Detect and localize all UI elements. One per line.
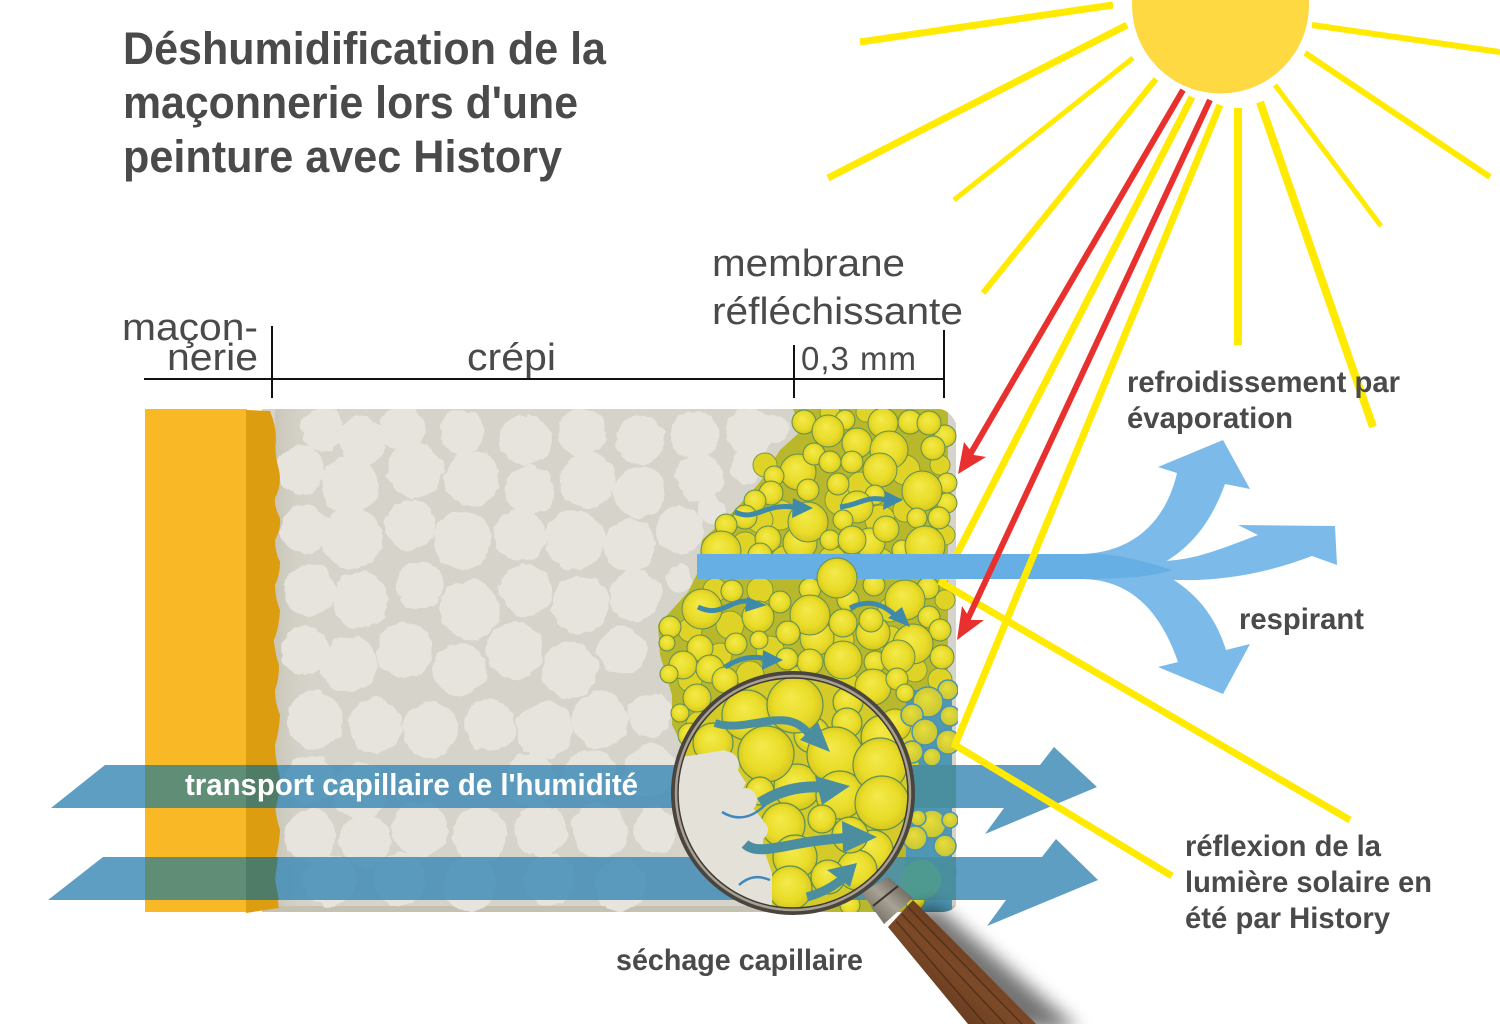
- crépi base: [262, 409, 956, 912]
- label: respirant: respirant: [1239, 603, 1364, 636]
- masonry shaded edge: [246, 410, 280, 913]
- red ray 1: [958, 90, 1183, 474]
- label: réflexion: été par History: [1185, 902, 1390, 935]
- membrane bubbles: [700, 409, 958, 554]
- lens contents: [677, 677, 909, 909]
- magnifying glass: [660, 670, 1080, 1024]
- band over wet zone: [905, 857, 956, 900]
- label: transport capillaire: transport capillaire de l'humidité: [185, 767, 638, 802]
- moisture arrow: [850, 603, 910, 627]
- reflected yellow ray 2: [955, 105, 1220, 876]
- red ray 2: [957, 100, 1210, 640]
- sun rays: [828, 5, 1500, 427]
- band over masonry: [145, 857, 246, 900]
- lens: magnified bubbles: [693, 677, 909, 910]
- red solar rays: [957, 90, 1210, 640]
- reflective membrane backing: [658, 409, 948, 915]
- masonry layer: [145, 409, 280, 913]
- label: membrane réfléchissante: réfléchissante: [712, 291, 963, 333]
- moisture arrow: [840, 491, 903, 510]
- ferrule: [862, 877, 913, 924]
- membrane filler bubbles: [678, 402, 955, 779]
- title: Déshumidification de la: [123, 23, 607, 74]
- label: réflexion: lumière solaire en: [1185, 866, 1432, 899]
- vapour arrow: right: [1120, 525, 1337, 580]
- vapour arrow: up: [1040, 440, 1250, 579]
- title: maçonnerie lors d'une: [123, 77, 578, 128]
- label: thickness: 0,3 mm: [801, 340, 916, 377]
- transport arrow 2: [48, 839, 1098, 926]
- band over masonry: [145, 765, 246, 808]
- label: membrane réfléchissante: membrane: [712, 243, 905, 285]
- lower right wet zone: [906, 690, 952, 912]
- label: membrane réfléchissante: [712, 243, 963, 333]
- label: refroidissement: évaporation: [1127, 402, 1293, 435]
- vapour stem: [697, 554, 1172, 579]
- breathable vapour arrows: [697, 440, 1337, 694]
- moisture arrow: [725, 650, 783, 670]
- reflected yellow ray 1: [942, 97, 1350, 820]
- moisture arrow: [735, 498, 813, 518]
- sun disc: [1132, 0, 1309, 94]
- label: réflexion: réflexion de la: [1185, 830, 1381, 863]
- handle shadow: [905, 905, 1080, 1024]
- layer labels and dimension lines: [122, 243, 963, 398]
- handle: [888, 900, 1036, 1024]
- vapour arrow: down: [1083, 553, 1250, 694]
- label: maçonnerie: maçon-: [122, 307, 258, 349]
- moisture arrow: [698, 597, 767, 612]
- label: séchage capillaire: séchage capillaire: [616, 944, 863, 977]
- band over wet zone: [913, 765, 956, 808]
- crépi blobs: [276, 406, 789, 911]
- label: maçonnerie: nerie: [167, 337, 258, 379]
- label: refroidissement: [1127, 366, 1400, 435]
- label: crépi: crépi: [467, 337, 556, 379]
- masonry face: [145, 409, 247, 912]
- label: réflexion: [1185, 830, 1432, 935]
- title: [123, 23, 607, 182]
- lens: magnified arrows: [715, 720, 877, 897]
- bubble over stem: [817, 558, 857, 598]
- dimension lines: [144, 326, 944, 398]
- dim bubbles in wet zone: [901, 680, 960, 880]
- small moisture arrows: [698, 491, 910, 670]
- title: peinture avec History: [123, 131, 562, 182]
- wall cross section: [262, 402, 962, 916]
- label: refroidissement: refroidissement par: [1127, 366, 1400, 399]
- label: maçonnerie: [122, 307, 258, 379]
- sun with rays: [828, 0, 1500, 427]
- transport arrow 1: [51, 747, 1097, 834]
- lens: magnified crépi: [677, 750, 772, 907]
- lens rim: [673, 673, 913, 913]
